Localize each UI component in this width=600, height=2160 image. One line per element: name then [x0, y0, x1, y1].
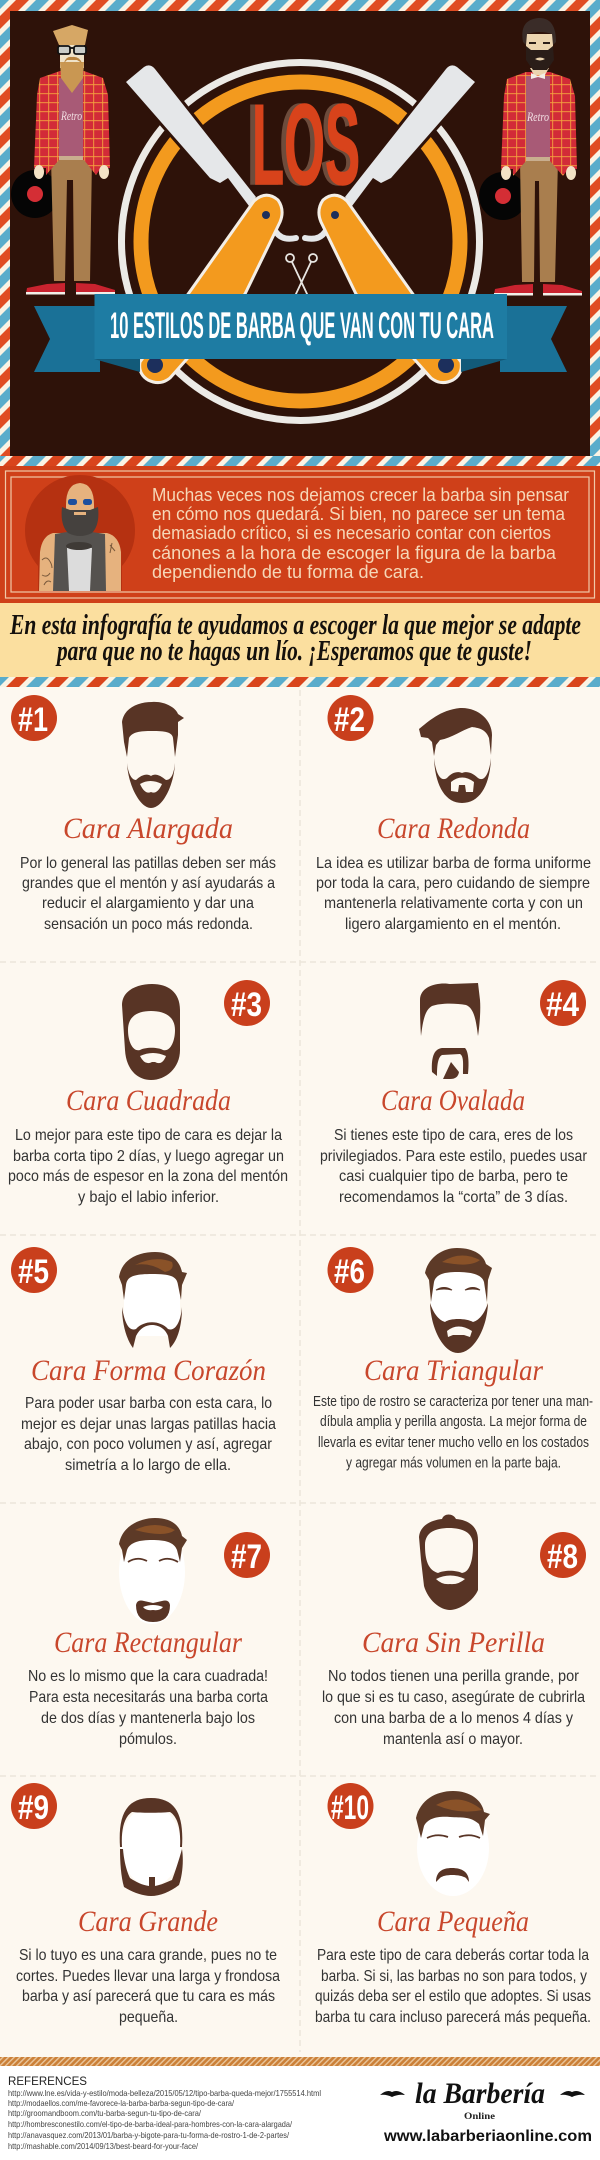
- ribbon right fold: [461, 359, 507, 372]
- plaid jacket: [501, 72, 577, 176]
- card #9: Cara Grande: [11, 1783, 280, 2026]
- number badge: [11, 1783, 57, 1829]
- vinyl record: [11, 170, 59, 218]
- description: [322, 1668, 585, 1748]
- description: barba y así parecerá que tu cara es más: [22, 1988, 275, 2005]
- intro text: en cómo nos quedará. Si bien, no parece ser un tema: [152, 503, 566, 524]
- description: mejor es dejar unas largas patillas hacia: [21, 1416, 276, 1433]
- card #10: Cara Pequeña: [315, 1783, 591, 2026]
- title: Cara Rectangular: [54, 1626, 242, 1659]
- description: mantenla así o mayor.: [383, 1731, 523, 1748]
- number badge: [224, 1532, 270, 1578]
- title: Cara Redonda: [377, 812, 530, 845]
- collar: [530, 68, 549, 75]
- panel: header: LOS: [252, 82, 360, 209]
- title: Cara Triangular: [364, 1354, 543, 1387]
- description: sensación un poco más redonda.: [44, 916, 253, 933]
- description: [21, 1395, 276, 1474]
- ribbon left tail: [34, 306, 100, 372]
- striped band below header: [0, 456, 600, 466]
- number badge: [540, 980, 586, 1026]
- number badge: #8: [547, 1538, 578, 1576]
- icon: beard and hair: [122, 702, 184, 808]
- description: recomendamos la “corta” de 3 días.: [339, 1189, 568, 1206]
- bearded man with plaid jacket: [479, 18, 582, 295]
- description: [313, 1394, 593, 1472]
- description: No todos tienen una perilla grande, por: [328, 1668, 580, 1685]
- references: http://hombresconestilo.com/el-tipo-de-barba-ideal-para-hombres-con-la-cara-alargada/: [8, 2119, 293, 2129]
- intro text: cánones a la hora de escoger la figura de la barba: [152, 542, 557, 563]
- description: Si lo tuyo es una cara grande, pues no te: [19, 1947, 277, 1964]
- description: cortes. Puedes llevar una larga y frondosa: [16, 1968, 280, 1985]
- references: http://modaellos.com/me-favorece-la-barba-barba-segun-tipo-de-cara/: [8, 2098, 235, 2108]
- dark beard: [526, 46, 554, 70]
- illustration: tattooed bearded man: [25, 475, 135, 591]
- icon: beard and hair: [120, 1798, 183, 1896]
- card #3: Cara Cuadrada: [8, 980, 288, 1206]
- shirt logo: Retro: [60, 108, 82, 123]
- red background: [0, 466, 600, 603]
- description: pómulos.: [119, 1731, 177, 1748]
- number badge: #7: [231, 1538, 262, 1576]
- face: [60, 38, 84, 68]
- description: [315, 1947, 591, 2026]
- references: REFERENCES: [8, 2076, 87, 2088]
- icon: right moustache: [560, 2091, 585, 2097]
- vinyl record: [479, 172, 527, 220]
- description: Por lo general las patillas deben ser más: [20, 855, 276, 872]
- description: Para poder usar barba con esta cara, lo: [25, 1395, 272, 1412]
- footer: [0, 2057, 600, 2160]
- description: abajo, con poco volumen y así, agregar: [24, 1436, 273, 1453]
- description: grandes que el mentón y así ayudarás a: [22, 875, 275, 892]
- description: poco más de espesor en la zona del mentón: [8, 1168, 288, 1185]
- icon: hair and moustache: [416, 1791, 490, 1896]
- title: Cara Grande: [78, 1905, 218, 1938]
- pants: [520, 160, 558, 282]
- description: reducir el alargamiento y dar una: [42, 895, 254, 912]
- title: Cara Pequeña: [377, 1905, 529, 1938]
- number badge: [328, 695, 374, 741]
- number badge: #5: [18, 1253, 49, 1291]
- references: http://anavasquez.com/2013/01/barba-y-bigote-para-tu-forma-de-rostro-1-de-2-partes/: [8, 2130, 290, 2140]
- description: Si tienes este tipo de cara, eres de los: [334, 1127, 573, 1144]
- number badge: #2: [334, 701, 365, 739]
- icon: beard and hair: [420, 983, 480, 1079]
- panel: header: LOS: [247, 82, 356, 209]
- description: de dos días y mantenerla bajo los: [41, 1710, 255, 1727]
- logo: la Barbería Online: [380, 2077, 585, 2121]
- frame lines: [6, 471, 594, 598]
- grid dashed lines: [0, 690, 600, 2052]
- title: Cara Cuadrada: [66, 1084, 231, 1117]
- heading: LOS: [247, 82, 360, 209]
- number badge: #10: [331, 1789, 369, 1827]
- shirt: [526, 76, 550, 159]
- number badge: #9: [18, 1789, 49, 1827]
- description: barba corta tipo 2 días, y luego agregar un: [13, 1148, 284, 1165]
- card #5: Cara Forma Corazón: [11, 1247, 276, 1474]
- references: http://mashable.com/2014/09/13/best-beard-for-your-face/: [8, 2141, 199, 2151]
- title: Cara Ovalada: [381, 1084, 525, 1117]
- panel: intro: [0, 466, 600, 603]
- striped divider: [0, 677, 600, 687]
- panel: highlighted statement: [0, 603, 600, 677]
- card #4: Cara Ovalada: [320, 980, 588, 1206]
- description: pequeña.: [119, 2009, 178, 2026]
- orange ring: [141, 82, 460, 401]
- description: [16, 1947, 280, 2026]
- pants: [51, 158, 92, 281]
- description: simetría a lo largo de ella.: [65, 1457, 231, 1474]
- number badge: [11, 695, 57, 741]
- plaid jacket: [34, 71, 110, 175]
- logo: la Barbería Online: Online: [464, 2111, 495, 2121]
- icon: beard and hair: [119, 1252, 187, 1348]
- description: [316, 855, 591, 933]
- description: [28, 1668, 268, 1748]
- card #2: Cara Redonda: [316, 695, 591, 933]
- description: Para esta necesitarás una barba corta: [29, 1689, 268, 1706]
- glasses: [58, 46, 86, 54]
- number badge: [328, 1783, 374, 1829]
- number badge: #1: [18, 701, 48, 739]
- shirt: [59, 78, 83, 158]
- references: [8, 2076, 321, 2151]
- icon: scissors: [286, 254, 317, 296]
- shoes: [494, 284, 582, 296]
- number badge: #6: [334, 1253, 365, 1291]
- number badge: [11, 1247, 57, 1293]
- title: Cara Alargada: [63, 812, 233, 845]
- description: y bajo el labio inferior.: [78, 1189, 219, 1206]
- hair: [522, 18, 556, 45]
- face: [526, 34, 553, 70]
- number badge: [540, 1532, 586, 1578]
- description: [20, 855, 276, 933]
- icon: beard and hair: [425, 1248, 492, 1353]
- description: y agregar más volumen en la parte baja.: [346, 1456, 561, 1472]
- references: http://groomandboom.com/tu-barba-segun-tu-tipo-de-cara/: [8, 2108, 202, 2118]
- ribbon left fold: [94, 359, 140, 372]
- description: casi cualquier tipo de barba, pero te: [339, 1168, 568, 1185]
- hatched band: [0, 2057, 600, 2066]
- intro text: Muchas veces nos dejamos crecer la barba sin pensar: [152, 484, 569, 505]
- icon: beard and hair: [419, 708, 492, 803]
- card #8: Cara Sin Perilla: [322, 1514, 586, 1748]
- description: No es lo mismo que la cara cuadrada!: [28, 1668, 268, 1685]
- title: Cara Forma Corazón: [31, 1354, 266, 1387]
- ribbon body: [94, 294, 507, 359]
- striped airmail border: [0, 0, 600, 466]
- eyes: [529, 42, 550, 44]
- icon: left razor: [126, 65, 296, 383]
- shirt logo: Retro: [526, 109, 549, 124]
- description: ligero alargamiento en el mentón.: [345, 916, 561, 933]
- icon: beard and hair: [419, 1514, 478, 1610]
- moustache: [64, 57, 82, 63]
- intro text: demasiado crítico, si es necesario contar con ciertos: [152, 522, 551, 543]
- card #7: Cara Rectangular: [28, 1518, 270, 1748]
- description: [320, 1127, 588, 1206]
- hair: [53, 25, 88, 45]
- description: Lo mejor para este tipo de cara es dejar la: [15, 1127, 282, 1144]
- intro text: dependiendo de tu forma de cara.: [152, 561, 424, 582]
- number badge: [328, 1247, 374, 1293]
- logo: la Barbería Online: la Barbería: [415, 2077, 545, 2110]
- number badge: [224, 980, 270, 1026]
- white ring: [122, 62, 480, 420]
- references: http://www.lne.es/vida-y-estilo/moda-belleza/2015/05/12/tipo-barba-queda-mejor/1755514.html: [8, 2088, 321, 2098]
- intro text: [152, 484, 569, 582]
- description: [8, 1127, 288, 1206]
- dark brown background: [10, 11, 590, 456]
- description: con una barba de a lo menos 4 días y: [334, 1710, 573, 1727]
- man with glasses and plaid jacket: [11, 25, 115, 294]
- title: Cara Sin Perilla: [362, 1626, 545, 1659]
- icon: right razor: [305, 65, 475, 383]
- icon: left moustache: [380, 2091, 405, 2097]
- hands: [34, 165, 109, 179]
- number badge: #3: [231, 986, 262, 1024]
- icon: beard and hair: [119, 1518, 187, 1624]
- hands: [501, 166, 576, 180]
- number badge: #4: [546, 986, 579, 1024]
- shoes: [26, 283, 115, 294]
- blond beard: [60, 62, 84, 93]
- banner: [34, 294, 567, 372]
- card #6: Cara Triangular: [313, 1247, 593, 1472]
- website url: www.labarberiaonline.com: [383, 2128, 592, 2145]
- bow tie: [531, 73, 545, 79]
- card #1: Cara Alargada: [11, 695, 276, 933]
- ribbon right tail: [500, 306, 567, 372]
- panel: header: [0, 0, 600, 466]
- icon: beard and hair: [122, 984, 180, 1080]
